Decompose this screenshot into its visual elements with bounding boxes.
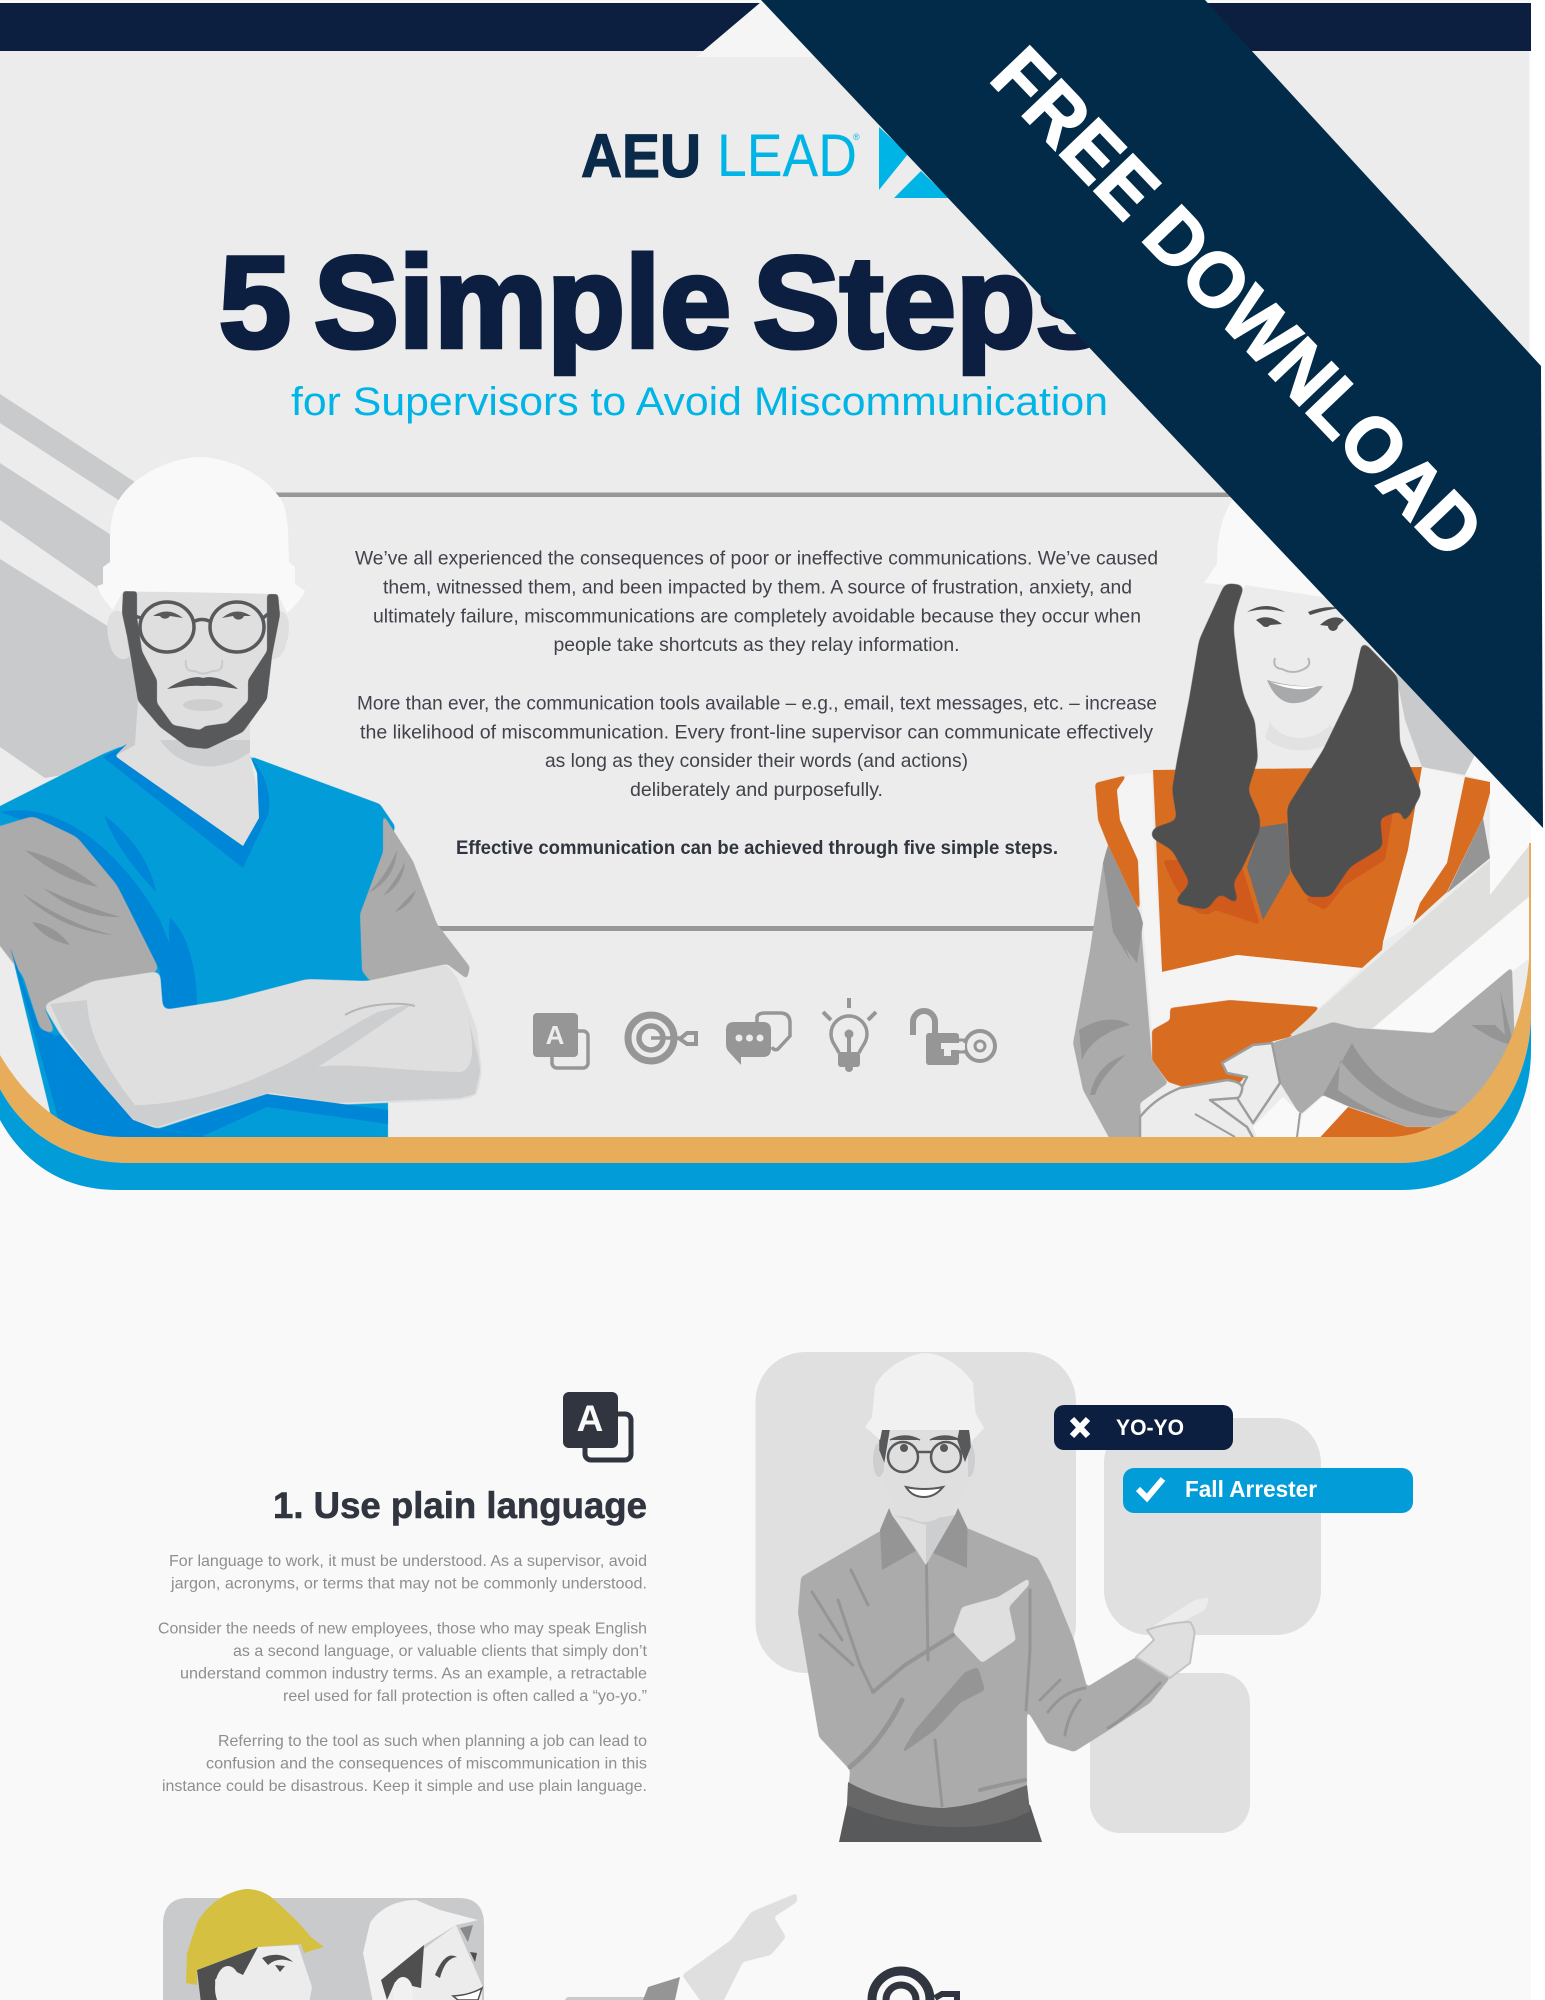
shirt folds <box>900 1667 985 1755</box>
top navy bar <box>0 3 1531 51</box>
hands <box>1222 1043 1280 1123</box>
glasses <box>128 602 268 652</box>
vest <box>1153 767 1422 972</box>
logo: AEU LEAD <box>581 122 949 198</box>
mouth <box>1267 680 1323 703</box>
worker pointing at labels <box>798 1353 1210 1842</box>
hard hat <box>97 457 305 613</box>
step 1 body text: jargon, acronyms, or terms that may not be commonly understood. <box>170 1576 647 1592</box>
right sleeve <box>360 814 470 981</box>
logo: AEU LEAD: LEAD <box>717 122 857 189</box>
hard hat <box>1204 480 1360 605</box>
intro text: people take shortcuts as they relay information. <box>554 634 960 656</box>
label: YO-YO wrong term <box>1054 1405 1233 1450</box>
lower orange vest <box>1313 1107 1433 1145</box>
rolled blueprint <box>1290 843 1531 1035</box>
title <box>219 229 1108 375</box>
worker in white hat <box>363 1900 482 2000</box>
smile <box>906 1487 943 1497</box>
collar <box>880 1508 918 1570</box>
neck and chest <box>1240 690 1375 830</box>
ears <box>107 611 289 659</box>
hair <box>1150 583 1260 910</box>
step 1 body text: confusion and the consequences of miscommunication in this <box>206 1756 647 1772</box>
icon: light bulb <box>823 998 876 1072</box>
intro text: as long as they consider their words (and actions) <box>545 750 968 772</box>
nose <box>186 660 222 674</box>
panel: hero background <box>0 50 1529 1137</box>
blue vest <box>0 744 395 1145</box>
moustache <box>167 677 238 689</box>
decorative notch triangle <box>696 2 830 57</box>
woman with orange safety vest <box>1073 480 1531 1145</box>
nose <box>1274 658 1309 672</box>
intro text: Effective communication can be achieved through five simple steps. <box>456 837 1058 859</box>
pants <box>839 1800 1042 1842</box>
step 1 body text: understand common industry terms. As an example, a retractable <box>180 1666 647 1682</box>
shirt <box>798 1528 1170 1825</box>
intro text: ultimately failure, miscommunications are completely avoidable because they occur when <box>373 606 1141 628</box>
intro text <box>355 548 1158 859</box>
logo: AEU LEAD: AEU <box>581 122 701 190</box>
eyes <box>153 611 251 620</box>
background diagonal stripes left <box>0 394 160 778</box>
step 2 icon: target <box>872 1971 957 2000</box>
ribbon: free download: FREE DOWNLOAD <box>975 30 1500 574</box>
face <box>1236 585 1362 728</box>
vest trim <box>103 744 269 868</box>
lower lip shade <box>183 699 223 711</box>
step 1 body text: as a second language, or valuable clients that simply don’t <box>233 1643 648 1660</box>
hard hat <box>865 1353 984 1442</box>
face <box>124 592 278 745</box>
ghost finger <box>1150 1597 1210 1628</box>
eyes <box>900 1444 908 1452</box>
brows and eyes <box>1247 606 1340 615</box>
beard and hair <box>122 591 280 749</box>
icon: target <box>628 1015 696 1061</box>
intro text: them, witnessed them, and been impacted by them. A source of frustration, anxiety, and <box>383 576 1132 598</box>
curved blue band <box>0 1013 1531 1190</box>
label: YO-YO wrong term: YO-YO <box>1116 1415 1184 1440</box>
step 1 body text: reel used for fall protection is often called a “yo-yo.” <box>283 1688 647 1705</box>
intro text: We’ve all experienced the consequences of poor or ineffective communications. We’ve caused <box>355 548 1158 570</box>
man with blue vest <box>0 457 482 1145</box>
intro text: More than ever, the communication tools available – e.g., email, text messages, etc. – increase <box>357 692 1157 714</box>
step 1 body text: For language to work, it must be understood. As a supervisor, avoid <box>169 1553 647 1570</box>
second hand <box>1136 1622 1194 1678</box>
neck <box>115 700 263 854</box>
step 1 icon: plain language: A <box>577 1398 603 1439</box>
intro text: the likelihood of miscommunication. Every front-line supervisor can communicate effectively <box>360 722 1153 744</box>
left sleeve <box>0 816 160 1036</box>
label: Fall Arrester right term <box>1123 1468 1413 1513</box>
chin shade <box>160 740 250 766</box>
icon: conversation <box>726 1013 790 1065</box>
hair shadow <box>1163 800 1395 925</box>
ribbon: free download <box>761 0 1543 828</box>
step 1 heading: 1. Use plain language <box>273 1485 647 1526</box>
left sleeve <box>1073 845 1168 1145</box>
rule bottom <box>420 926 1100 931</box>
background diagonal stripe right <box>1395 670 1475 775</box>
step 1 body text: Consider the needs of new employees, those who may speak English <box>158 1620 647 1638</box>
title: Simple <box>314 229 731 375</box>
crossed arms <box>43 964 482 1129</box>
intro text: deliberately and purposefully. <box>630 779 883 801</box>
worker pointing up <box>565 1893 797 2000</box>
ear <box>215 1966 241 2000</box>
title: 5 <box>219 229 291 375</box>
title: Steps <box>753 229 1108 375</box>
step 2 illustration panel <box>163 1898 484 2000</box>
ears <box>873 1443 885 1477</box>
glasses <box>888 1442 961 1472</box>
step 1 body text <box>158 1553 648 1795</box>
step 1 body text: Referring to the tool as such when planning a job can lead to <box>218 1733 647 1750</box>
pointing hand <box>953 1578 1029 1663</box>
step 1 background panels <box>756 1352 1321 1833</box>
logo: AEU LEAD: ® <box>853 132 860 142</box>
step 1 body text: instance could be disastrous. Keep it simple and use plain language. <box>162 1778 647 1795</box>
icon row <box>533 998 995 1072</box>
label: Fall Arrester right term: Fall Arrester <box>1185 1476 1317 1502</box>
icon: lock and key <box>913 1011 995 1065</box>
face <box>884 1430 968 1522</box>
subtitle: for Supervisors to Avoid Miscommunication <box>291 380 1108 424</box>
right arm <box>1272 967 1515 1127</box>
shirt <box>1247 823 1290 920</box>
belt <box>847 1782 1030 1827</box>
vest lower shadow <box>10 947 58 1117</box>
worker in yellow hat <box>186 1889 324 2000</box>
curved orange band <box>0 843 1531 1163</box>
sleeve fold shading <box>1079 920 1130 1095</box>
rule top <box>268 492 1248 497</box>
step 1 icon: plain language <box>563 1392 631 1460</box>
hair <box>880 1430 970 1460</box>
icon: plain language <box>533 1013 588 1068</box>
icon: plain language: A <box>546 1020 565 1050</box>
arm shading <box>50 1000 415 1127</box>
